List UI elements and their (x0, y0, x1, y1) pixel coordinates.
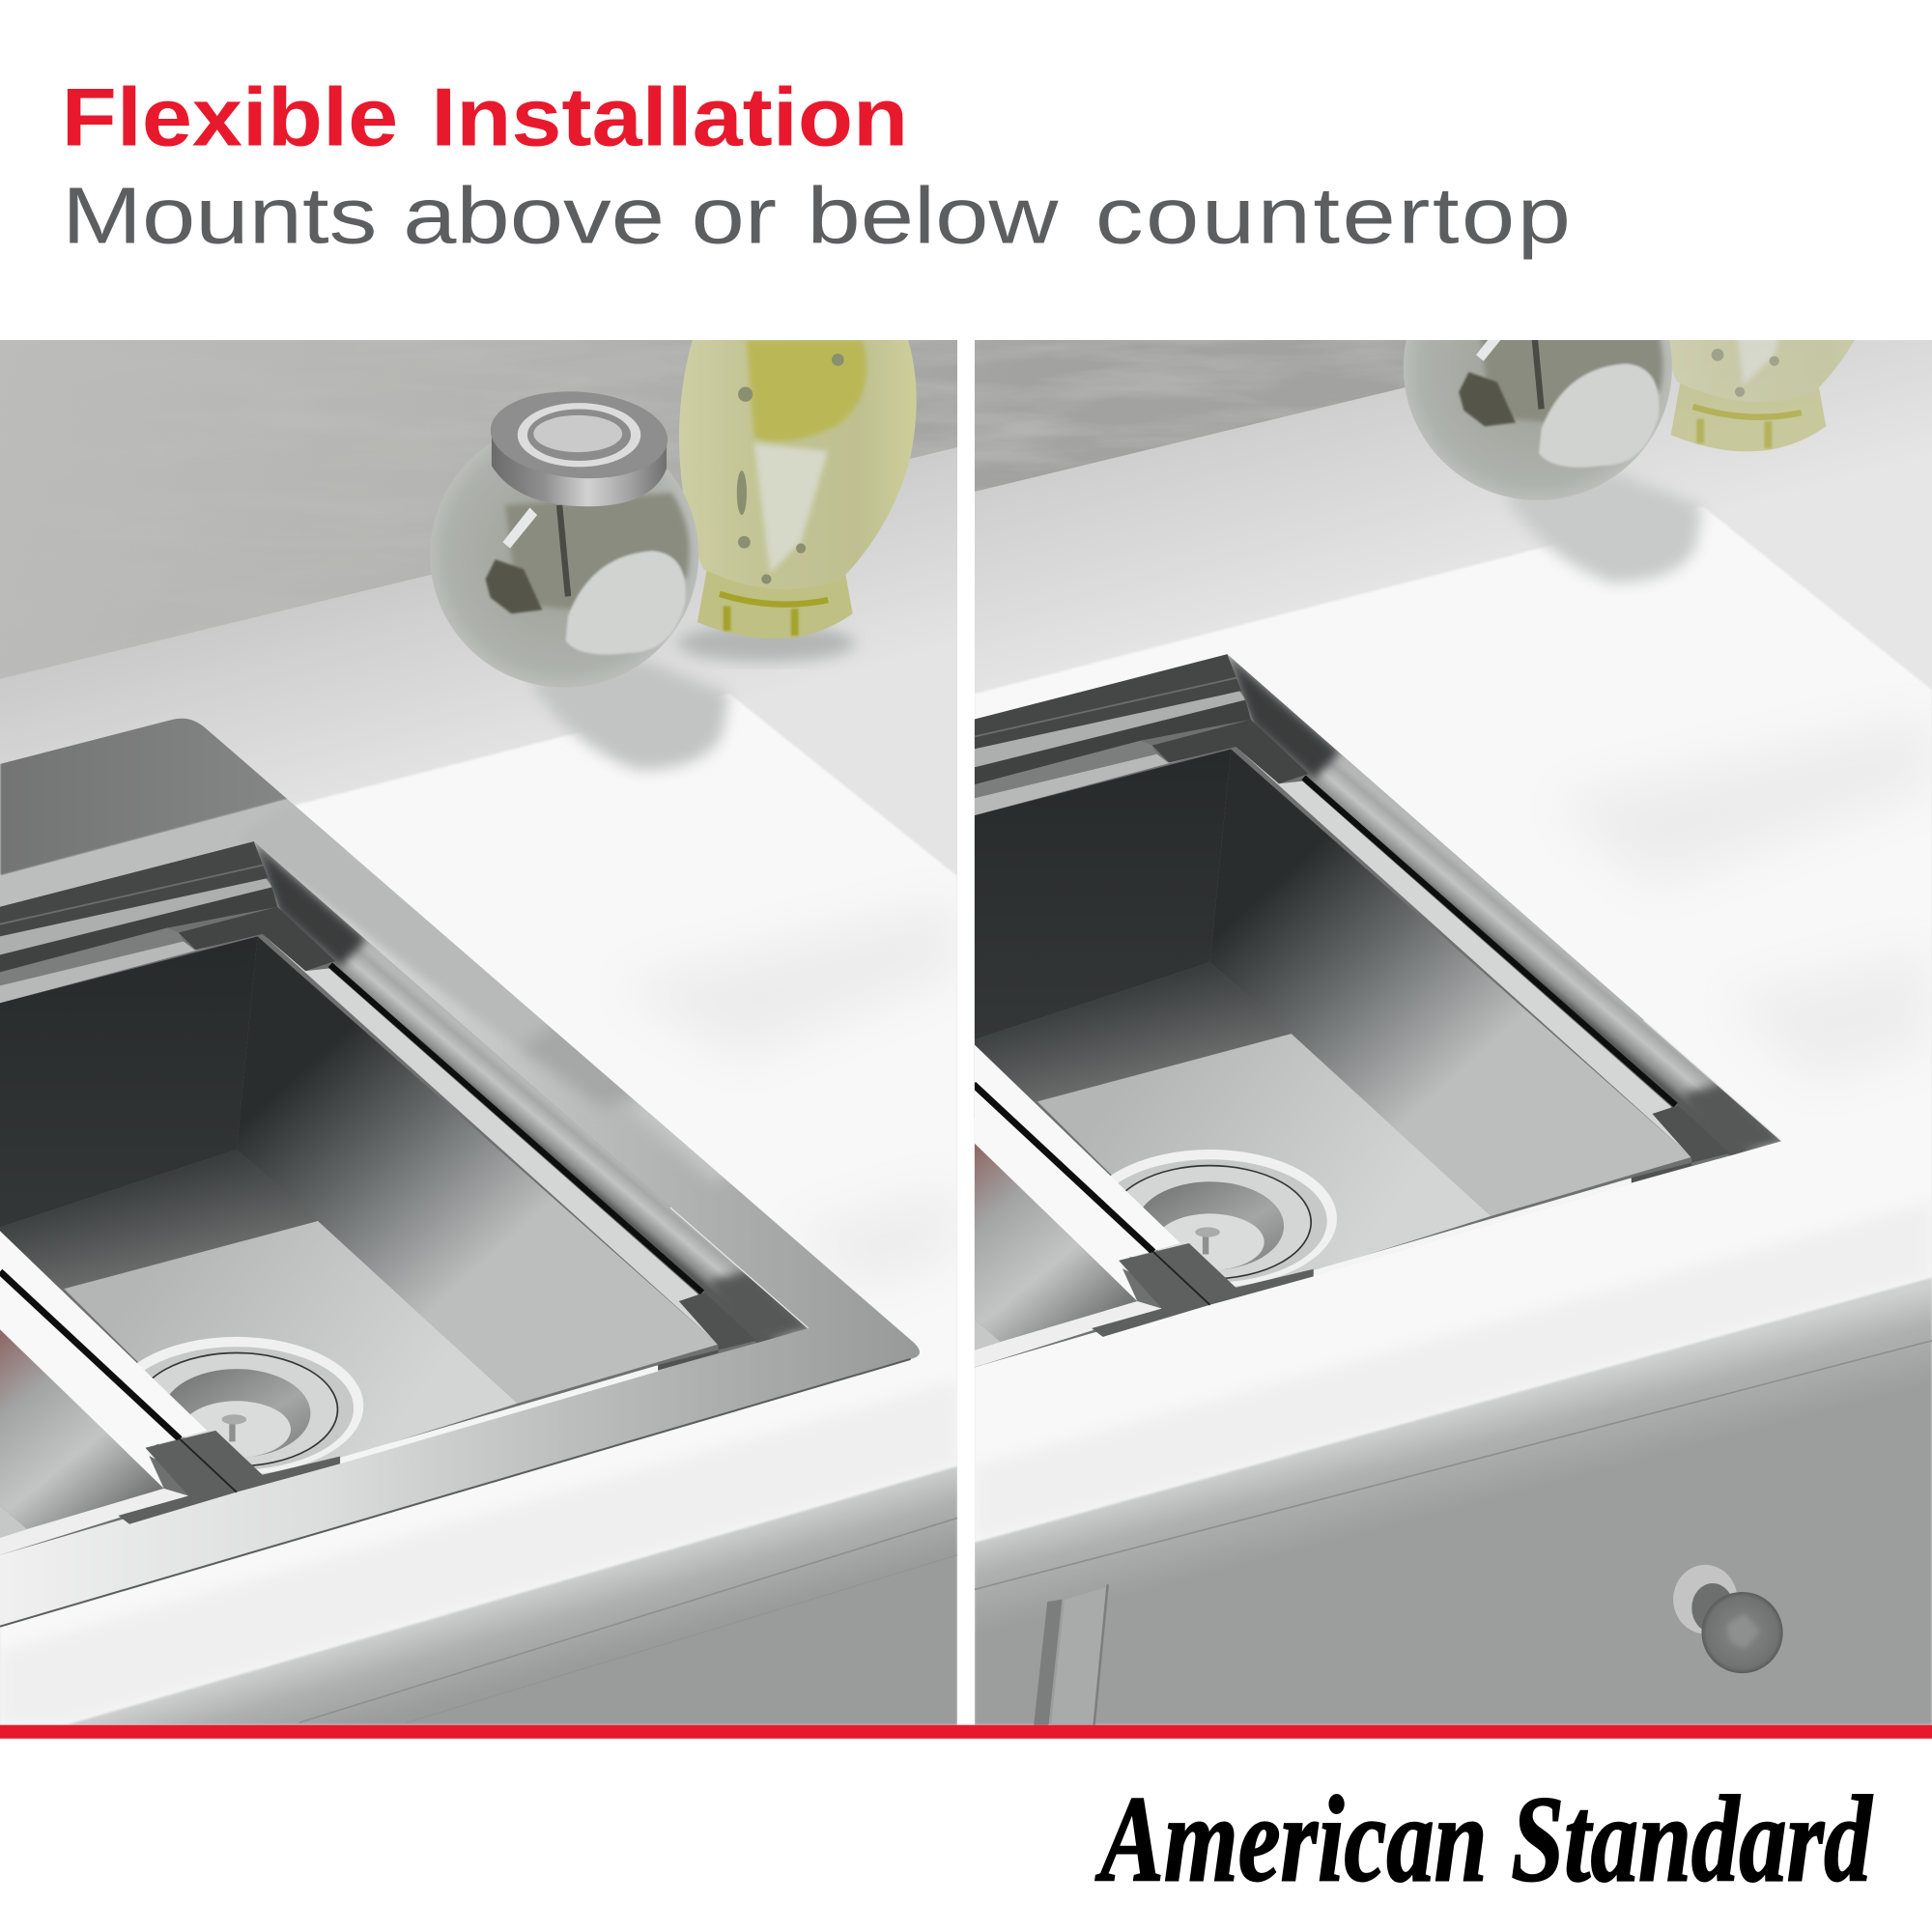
strainer knob on jar, left panel (488, 385, 670, 506)
shadow beside vase (678, 625, 855, 662)
glass jar, right panel (1404, 234, 1672, 500)
title: Flexible Installation: Installation (431, 71, 908, 163)
rear corner clip (179, 907, 335, 971)
subtitle: Mounts above or below countertop: or (692, 171, 777, 260)
base cabinet, left panel (67, 1466, 957, 1725)
white divider rail (0, 1231, 207, 1489)
front-right corner clip and tab (657, 1293, 756, 1370)
subtitle: Mounts above or below countertop: countertop (1095, 171, 1573, 260)
wall backsplash, right panel (975, 340, 1601, 492)
bowl back wall (0, 936, 258, 1227)
glass glint (502, 508, 537, 549)
stem (559, 505, 568, 596)
subtitle: Mounts above or below countertop: Mounts (62, 171, 377, 260)
red divider bar (0, 1725, 1932, 1739)
base cabinet and drawer, right panel (975, 1278, 1932, 1725)
subtitle: Mounts above or below countertop: below (807, 171, 1059, 260)
panel: drop-in top-mount sink installation (0, 340, 957, 1725)
bowl right wall (237, 936, 719, 1404)
panel: undermount sink installation (974, 153, 1932, 1725)
brushed floor (64, 1221, 518, 1475)
white reflection (565, 551, 686, 655)
vase body (679, 340, 917, 589)
second bowl front rim (0, 1489, 188, 1555)
dried flowers (737, 354, 844, 584)
sink basin interior (0, 841, 813, 1555)
counter shadow beneath jar (529, 659, 729, 770)
front white edge strip (340, 1365, 658, 1463)
right rim strip (263, 934, 719, 1345)
subtitle: Mounts above or below countertop: above (403, 171, 665, 260)
basin opening base (0, 841, 809, 1555)
countertop, right panel (975, 340, 1932, 1725)
vase foot (697, 560, 853, 639)
olive glass vase, left panel (679, 340, 917, 639)
stainless flange rim of top-mount sink (0, 702, 920, 1627)
second bowl floor sliver (0, 1506, 27, 1538)
dark floor shadow (0, 1150, 318, 1306)
glass jar, left panel (430, 421, 698, 688)
clip seam (180, 1439, 237, 1492)
undermount sink basin (974, 654, 1786, 1368)
countertop, left panel (0, 340, 957, 1725)
marble drawer knob (1673, 1565, 1783, 1673)
dark upper contents (505, 493, 689, 610)
top rim strip (0, 934, 258, 1003)
drain (110, 1337, 363, 1475)
olive vase, right panel (1652, 153, 1889, 451)
wall backsplash, left panel (0, 340, 957, 679)
second bowl (0, 1329, 164, 1529)
yellow liquid (747, 340, 867, 441)
title: Flexible Installation: Flexible (62, 71, 398, 163)
centre T-shaped clip (118, 1431, 340, 1524)
black shadow gap (330, 965, 702, 1293)
black divider gap (0, 1271, 180, 1439)
dried leaf (486, 559, 542, 613)
back rail channel (0, 841, 286, 985)
pale inner reflection (754, 443, 828, 573)
rounded drain rail and channel (254, 841, 813, 1350)
counter shadow beneath jar, right panel (1503, 472, 1703, 582)
